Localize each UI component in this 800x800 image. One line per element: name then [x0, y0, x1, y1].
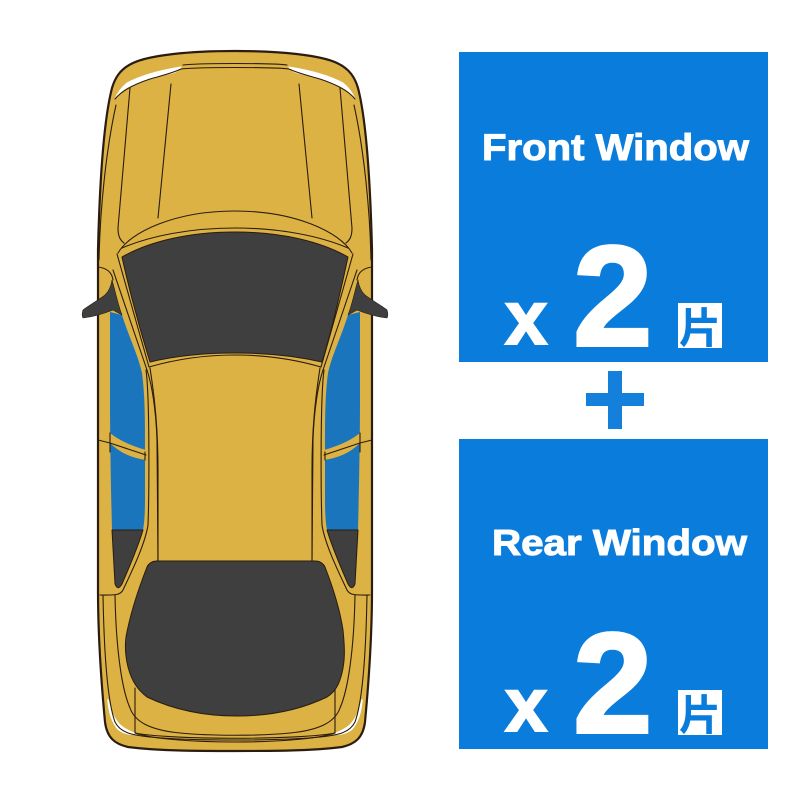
right mirror: [348, 280, 388, 318]
panel: rear window: [459, 439, 768, 764]
white gaps at the front corners: [115, 67, 355, 99]
multiplier x: x: [505, 276, 547, 361]
heading: front window: Front Window: [482, 127, 749, 168]
white gaps at the rear corners: [108, 700, 362, 734]
car body: [98, 51, 372, 751]
number 2: 2: [573, 604, 653, 764]
body and roof outline details: [98, 64, 372, 742]
window dividers: [110, 433, 146, 460]
rear window: [125, 561, 344, 716]
rear side windows, dark: [112, 530, 143, 588]
car illustration, top view: [82, 51, 388, 751]
number 2: 2: [573, 218, 653, 376]
windshield: [122, 232, 348, 362]
side windows, blue: [110, 312, 145, 530]
unit badge: 片: [679, 305, 721, 352]
multiplier x: x: [505, 663, 547, 748]
panel: front window: [459, 52, 768, 376]
left mirror: [82, 280, 122, 318]
heading: rear window: Rear Window: [492, 522, 748, 563]
unit badge: 片: [679, 692, 721, 739]
plus sign: [586, 371, 644, 429]
